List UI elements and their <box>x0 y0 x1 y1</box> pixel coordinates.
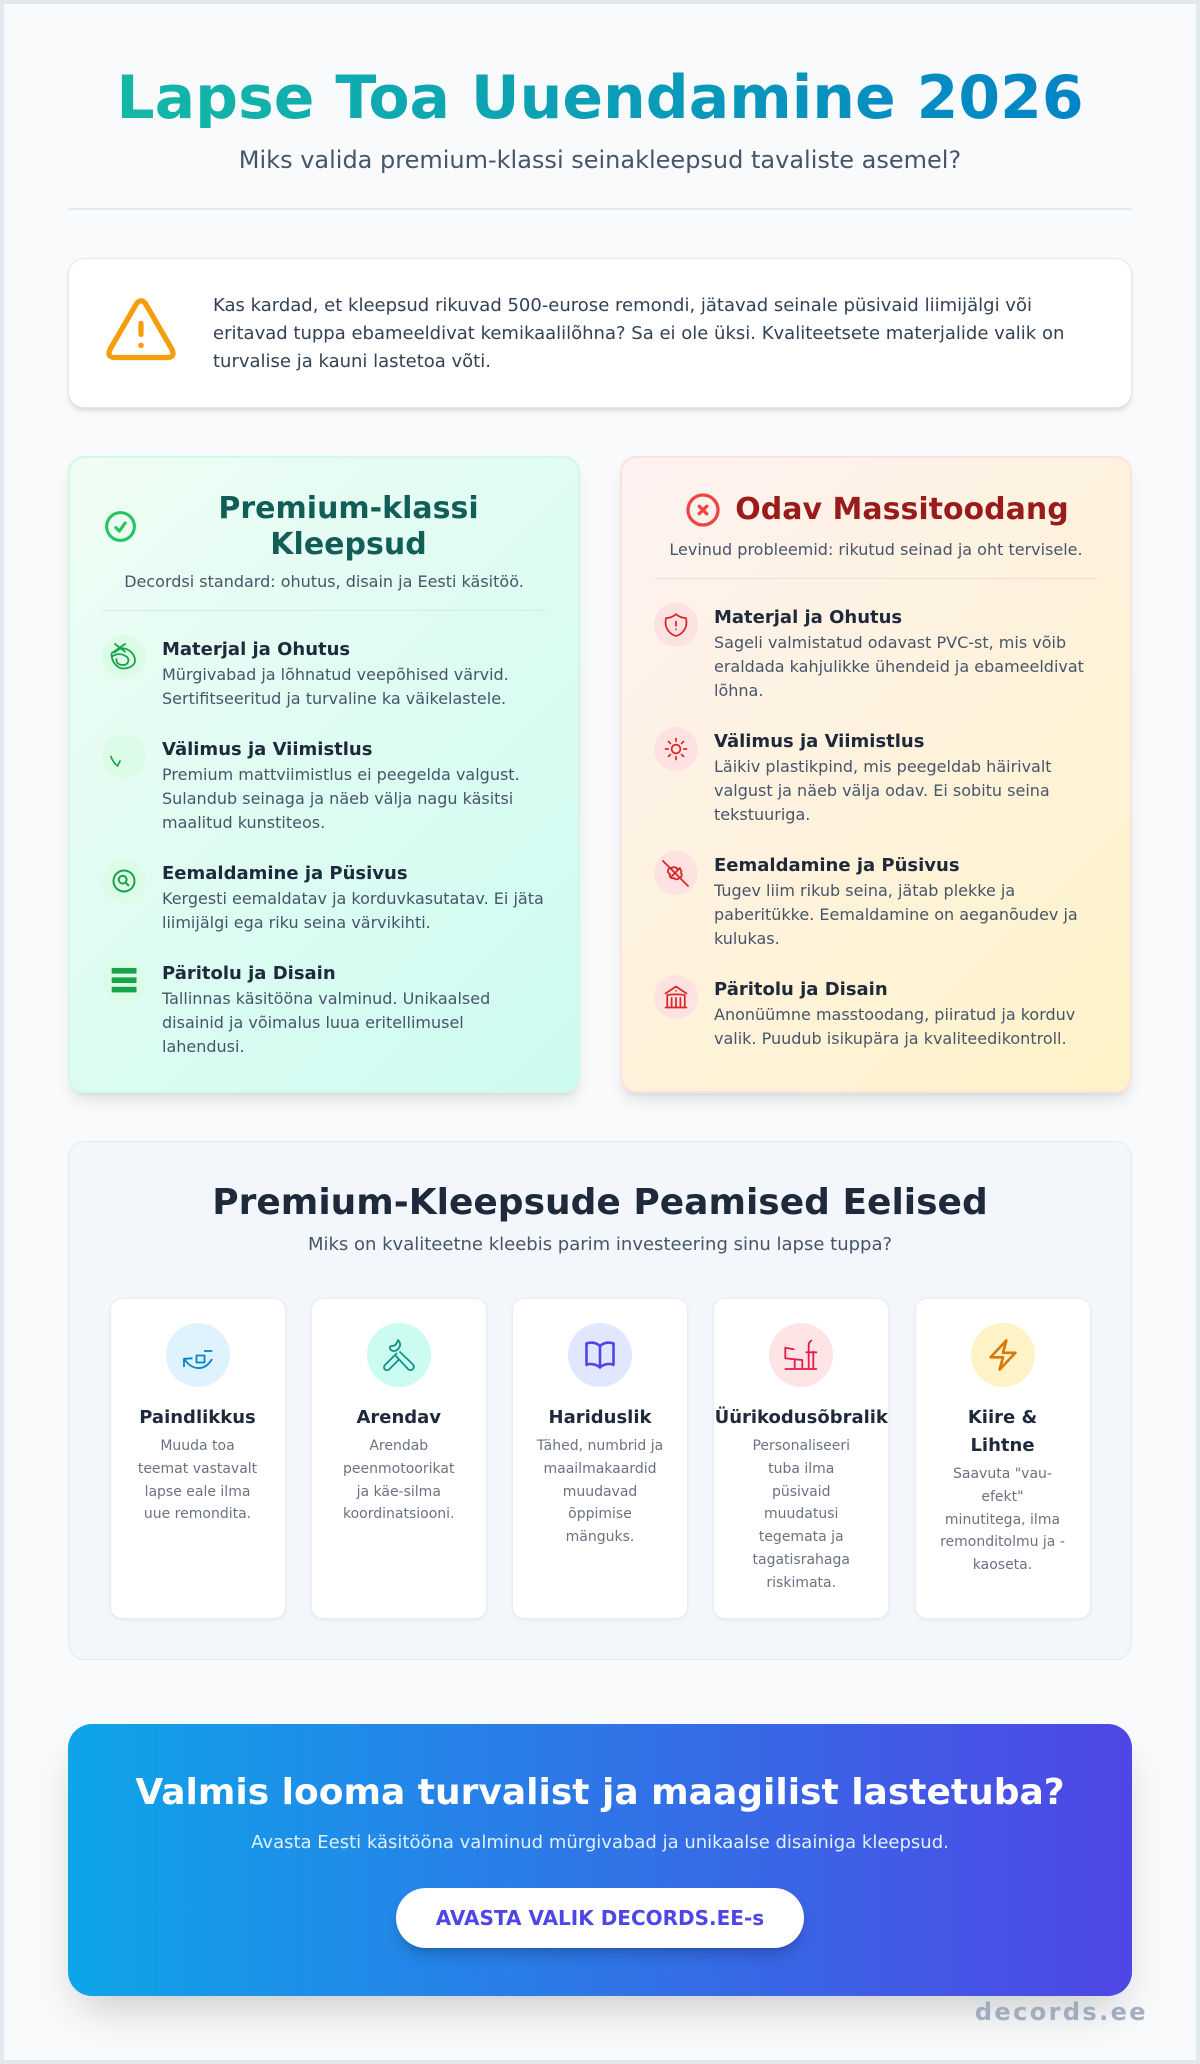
benefit card: educational: õppimise <box>568 1506 632 1522</box>
row: removal: Kergesti eemaldatav ja korduvkasutatav. Ei jäta <box>162 889 544 908</box>
row: finish: valgust ja näeb välja odav. Ei sobitu seina <box>714 781 1050 800</box>
benefit cards <box>110 1298 1091 1620</box>
row: material <box>654 603 1084 700</box>
row: finish: tekstuuriga. <box>714 805 810 824</box>
icon: magnifying glass circle <box>102 859 146 903</box>
benefit card: educational: Tähed, numbrid ja <box>537 1438 663 1454</box>
benefit card: flexibility: uue remondita. <box>144 1506 251 1522</box>
cheap intro <box>654 538 1098 579</box>
row: finish: Välimus ja Viimistlus <box>162 739 372 760</box>
callout: worry alert <box>68 258 1132 408</box>
benefit card: rental friendly: muudatusi <box>764 1506 838 1522</box>
alert text: Kas kardad, et kleepsud rikuvad 500-eurose remondi, jätavad seinale püsivaid liimijälgi või <box>213 295 1032 316</box>
benefit card: quick and easy: efekt" <box>981 1489 1024 1505</box>
row: material: eraldada kahjulikke ühendeid ja ebameeldivat <box>714 657 1084 676</box>
alert text: turvalise ja kauni lastetoa võti. <box>213 351 491 372</box>
row: removal: paberitükke. Eemaldamine on aeganõudev ja <box>714 905 1078 924</box>
title: Lapse Toa Uuendamine 2026 <box>116 63 1084 133</box>
benefit card: rental friendly: tagatisrahaga <box>752 1552 850 1568</box>
benefit card: flexibility: Muuda toa <box>160 1438 235 1454</box>
row: material: Sertifitseeritud ja turvaline ka väikelastele. <box>162 689 506 708</box>
header <box>68 68 1132 210</box>
row: material: lõhna. <box>714 681 763 700</box>
benefit card: educational: muudavad <box>563 1484 637 1500</box>
benefit card: rental friendly: riskimata. <box>766 1574 836 1590</box>
alert text <box>213 295 1064 372</box>
panel: premium stickers <box>68 456 580 1093</box>
benefit card: rental friendly: tuba ilma <box>768 1461 834 1477</box>
row: finish: Sulandub seinaga ja näeb välja nagu käsitsi <box>162 789 513 808</box>
premium intro: Decordsi standard: ohutus, disain ja Eesti käsitöö. <box>124 572 524 591</box>
row: origin: valik. Puudub isikupära ja kvaliteedikontroll. <box>714 1029 1067 1048</box>
row: removal: kulukas. <box>714 929 780 948</box>
icon: shield exclamation <box>654 603 698 647</box>
panel: key benefits <box>68 1141 1132 1660</box>
call to action <box>68 1724 1132 1996</box>
benefit card: quick and easy: Kiire & <box>968 1407 1037 1428</box>
icon: check circle <box>105 511 136 542</box>
panel: cheap mass production <box>620 456 1132 1093</box>
benefit card: rental friendly: tegemata ja <box>759 1529 844 1545</box>
icon: sun <box>654 727 698 771</box>
row: material: Mürgivabad ja lõhnatud veepõhised värvid. <box>162 665 509 684</box>
benefit card: quick and easy: kaoseta. <box>973 1557 1032 1573</box>
row: finish: Välimus ja Viimistlus <box>714 731 924 752</box>
icon: tools <box>367 1323 431 1387</box>
row: finish: maalitud kunstiteos. <box>162 813 325 832</box>
cta button <box>396 1888 804 1948</box>
benefit card: rental friendly: Üürikodusõbralik <box>715 1407 888 1428</box>
benefit card: flexibility: teemat vastavalt <box>138 1461 257 1477</box>
row: origin: Anonüümne masstoodang, piiratud ja korduv <box>714 1005 1075 1024</box>
benefit card: educational: maailmakaardid <box>544 1461 656 1477</box>
benefit card: educational <box>512 1298 688 1618</box>
benefit card: developing: ja käe-silma <box>357 1484 441 1500</box>
benefit card: educational: mänguks. <box>566 1529 634 1545</box>
row: origin: lahendusi. <box>162 1037 245 1056</box>
row: origin: Tallinnas käsitööna valminud. Unikaalsed <box>162 989 490 1008</box>
row: finish: Premium mattviimistlus ei peegelda valgust. <box>162 765 520 784</box>
benefit card: rental friendly: Personaliseeri <box>752 1438 850 1454</box>
benefit card: flexibility <box>110 1298 286 1618</box>
benefit card: rental friendly: püsivaid <box>772 1484 831 1500</box>
benefit card: quick and easy <box>914 1298 1090 1618</box>
row: origin: Päritolu ja Disain <box>162 963 336 984</box>
benefit card: quick and easy: Saavuta "vau- <box>953 1466 1052 1482</box>
icon: small tick <box>102 735 146 779</box>
row: material: Materjal ja Ohutus <box>714 607 902 628</box>
row: finish <box>654 727 1052 824</box>
benefit card: quick and easy: remonditolmu ja - <box>940 1534 1065 1550</box>
row: removal: Eemaldamine ja Püsivus <box>162 863 408 884</box>
benefit card: developing <box>311 1298 487 1618</box>
subtitle: Miks valida premium-klassi seinakleepsud tavaliste asemel? <box>239 146 961 174</box>
icon: open book <box>568 1323 632 1387</box>
benefits heading: Premium-Kleepsude Peamised Eelised <box>212 1182 988 1223</box>
row: removal: Eemaldamine ja Püsivus <box>714 855 960 876</box>
row: removal <box>654 851 1078 948</box>
row: removal: Tugev liim rikub seina, jätab plekke ja <box>714 881 1015 900</box>
heading: premium: Premium-klassi <box>218 491 479 526</box>
row: origin <box>654 975 1075 1048</box>
cta heading: Valmis looma turvalist ja maagilist lastetuba? <box>135 1772 1065 1813</box>
icon: crossed-out knot <box>654 851 698 895</box>
icon: bolt <box>970 1323 1034 1387</box>
icon: x circle <box>686 493 720 527</box>
row: material: Sageli valmistatud odavast PVC-st, mis võib <box>714 633 1066 652</box>
benefit card: educational: Hariduslik <box>548 1407 651 1428</box>
cta text: Avasta Eesti käsitööna valminud mürgivabad ja unikaalse disainiga kleepsud. <box>251 1832 949 1853</box>
row: removal <box>102 859 544 932</box>
icon: warning triangle <box>106 298 176 360</box>
benefit card: flexibility: lapse eale ilma <box>145 1484 250 1500</box>
benefit card: quick and easy: minutitega, ilma <box>945 1512 1060 1528</box>
heading: premium <box>105 491 479 562</box>
row: removal: liimijälgi ega riku seina värvikihti. <box>162 913 431 932</box>
heading: cheap: Odav Massitoodang <box>735 492 1069 527</box>
row: material <box>102 635 509 708</box>
heading: premium: Kleepsud <box>270 527 427 562</box>
benefit card: developing: peenmotoorikat <box>343 1461 454 1477</box>
benefit card: developing: Arendav <box>356 1407 441 1428</box>
row: origin: Päritolu ja Disain <box>714 979 888 1000</box>
premium intro <box>102 570 546 611</box>
icon: bars <box>102 959 146 1003</box>
watermark: decords.ee <box>975 1998 1148 2026</box>
icon: swirl <box>102 635 146 679</box>
benefit card: rental friendly <box>713 1298 889 1618</box>
cta button: AVASTA VALIK DECORDS.EE-s <box>436 1906 764 1930</box>
row: origin: disainid ja võimalus luua eritellimusel <box>162 1013 464 1032</box>
alert text: eritavad tuppa ebameeldivat kemikaalilõhna? Sa ei ole üksi. Kvaliteetsete materjalide valik on <box>213 323 1064 344</box>
icon: room furniture <box>769 1323 833 1387</box>
benefit card: developing: Arendab <box>369 1438 428 1454</box>
row: finish: Läikiv plastikpind, mis peegeldab häirivalt <box>714 757 1052 776</box>
benefit card: flexibility: Paindlikkus <box>139 1407 256 1428</box>
benefits subheading: Miks on kvaliteetne kleebis parim investeering sinu lapse tuppa? <box>308 1234 892 1255</box>
row: origin <box>102 959 490 1056</box>
benefit card: quick and easy: Lihtne <box>970 1435 1035 1456</box>
icon: flexibility <box>166 1323 230 1387</box>
benefit card: developing: koordinatsiooni. <box>343 1506 454 1522</box>
row: material: Materjal ja Ohutus <box>162 639 350 660</box>
row: finish <box>102 735 520 832</box>
icon: building library <box>654 975 698 1019</box>
cheap intro: Levinud probleemid: rikutud seinad ja oht tervisele. <box>669 540 1083 559</box>
